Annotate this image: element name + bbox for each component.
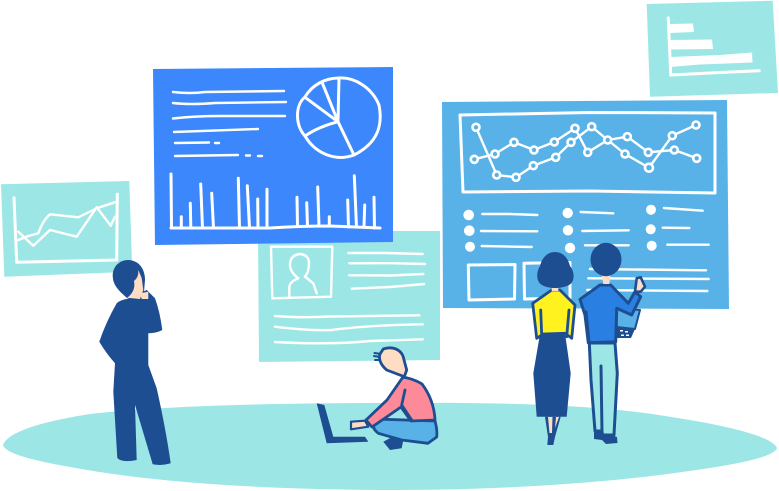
floor ellipse	[3, 403, 777, 490]
figure: person sitting with laptop	[317, 348, 437, 450]
panel: line chart left	[1, 181, 132, 277]
neck	[602, 274, 611, 284]
trouser crease	[601, 366, 602, 432]
raised hand	[635, 277, 645, 292]
arm crease	[402, 390, 412, 420]
arm lines	[541, 310, 569, 337]
lower text lines	[587, 269, 709, 291]
empty boxes	[468, 262, 570, 300]
chart axes	[14, 194, 117, 262]
shoes	[594, 430, 618, 444]
tablet keys	[620, 330, 629, 336]
panel: profile card	[258, 231, 440, 362]
pie chart	[298, 78, 380, 157]
tablet	[617, 308, 640, 338]
figure: woman in yellow top	[533, 252, 575, 445]
body	[99, 290, 171, 465]
legs	[545, 417, 561, 445]
bars and axis	[668, 18, 759, 75]
chart line two	[18, 202, 117, 240]
head	[113, 260, 145, 298]
hair tufts	[374, 353, 381, 360]
trousers	[589, 343, 617, 435]
bar chart	[171, 174, 380, 228]
photo frame with silhouette	[271, 247, 332, 298]
text lines	[173, 91, 286, 156]
line chart series two	[471, 125, 700, 163]
face	[127, 270, 143, 299]
head	[590, 243, 622, 276]
bullet list dots	[463, 205, 657, 253]
panel: horizontal bar chart top right	[647, 1, 778, 97]
foot	[383, 437, 403, 450]
yellow top	[533, 290, 575, 338]
skirt	[533, 333, 571, 417]
panel: light blue dashboard	[442, 100, 729, 309]
torso and arm	[366, 377, 435, 427]
line chart frame	[460, 112, 715, 193]
neck	[552, 286, 558, 291]
hand	[140, 292, 148, 299]
figure: person thinking	[99, 260, 171, 465]
line chart series one	[472, 122, 700, 181]
head	[379, 348, 407, 377]
shirt	[580, 285, 641, 343]
hair	[537, 252, 574, 288]
text lines	[275, 253, 425, 343]
legs	[373, 419, 437, 443]
laptop	[317, 403, 368, 443]
bullet list lines	[481, 208, 709, 247]
hand	[351, 421, 368, 429]
skin on legs	[548, 417, 559, 433]
chart line one	[18, 207, 115, 246]
panel: bright blue report	[153, 67, 393, 245]
shirt arm crease	[586, 312, 589, 342]
figure: man with tablet	[580, 243, 645, 444]
